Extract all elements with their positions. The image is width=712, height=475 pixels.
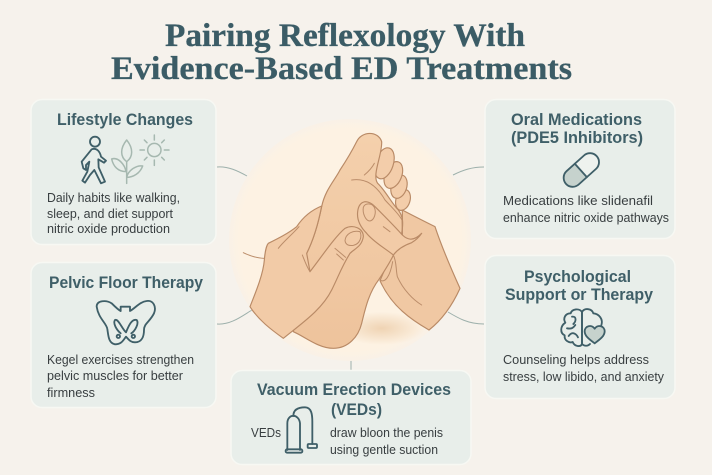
- background circle: [229, 119, 471, 361]
- title: Evidence-Based ED Treatments: [111, 51, 572, 87]
- text: pelvic description: Kegel exercises strengthen: [47, 352, 194, 367]
- text: lifestyle description: nitric oxide production: [47, 221, 170, 236]
- title: Pairing Reflexology With: [165, 18, 525, 54]
- text: psychological description: [503, 352, 664, 384]
- heading: psychological support: [505, 268, 654, 304]
- heading: psychological support: Psychological: [524, 268, 631, 286]
- text: VED description: [251, 425, 443, 457]
- icon: walking person, plant, sun: [82, 135, 169, 183]
- panel: vacuum erection devices: [231, 370, 471, 464]
- heading: oral medications: (PDE5 Inhibitors): [511, 129, 643, 147]
- text: pelvic description: pelvic muscles for better: [47, 368, 184, 383]
- heading: oral medications: [511, 111, 643, 147]
- far hand: [380, 210, 460, 330]
- text: pelvic description: firmness: [47, 385, 95, 400]
- text: oral description: Medications like slidenafil: [503, 193, 653, 208]
- title: [111, 18, 572, 87]
- panel: oral medications: [485, 100, 675, 238]
- text: pelvic description: [47, 352, 194, 400]
- text: oral description: enhance nitric oxide pathways: [503, 210, 669, 225]
- text: VED description: using gentle suction: [330, 442, 438, 457]
- icon: vacuum device: [286, 407, 317, 453]
- text: VED description: VEDs: [251, 425, 281, 440]
- small toes: [371, 145, 413, 212]
- icon: brain and heart: [561, 309, 605, 346]
- heading: oral medications: Oral Medications: [511, 111, 642, 129]
- text: oral description: [503, 193, 669, 225]
- foot: [293, 133, 403, 348]
- text: lifestyle description: sleep, and diet support: [47, 206, 173, 221]
- text: VED description: draw bloon the penis: [330, 425, 443, 440]
- text: lifestyle description: [47, 190, 180, 236]
- central illustration: hands massaging a foot: [229, 119, 471, 361]
- heading: vacuum erection devices: (VEDs): [331, 401, 382, 419]
- hands and foot: [243, 133, 460, 348]
- heading: psychological support: Support or Therapy: [505, 286, 654, 304]
- text: psychological description: Counseling helps address: [503, 352, 649, 367]
- heading: vacuum erection devices: Vacuum Erection Devices: [257, 381, 451, 399]
- icon: capsule: [560, 149, 603, 191]
- text: psychological description: stress, low libido, and anxiety: [503, 369, 664, 384]
- heading: lifestyle changes: Lifestyle Changes: [57, 111, 193, 129]
- connector lines: [217, 167, 484, 370]
- near thumb: [357, 202, 422, 255]
- heading: pelvic floor therapy: Pelvic Floor Therapy: [49, 274, 204, 292]
- panel: psychological support: [485, 256, 675, 398]
- panel: lifestyle changes: [31, 100, 216, 244]
- left hand: [250, 206, 363, 338]
- icon: pelvis: [97, 301, 155, 344]
- heading: vacuum erection devices: [257, 381, 451, 419]
- text: lifestyle description: Daily habits like walking,: [47, 190, 180, 205]
- panel: pelvic floor therapy: [31, 262, 216, 408]
